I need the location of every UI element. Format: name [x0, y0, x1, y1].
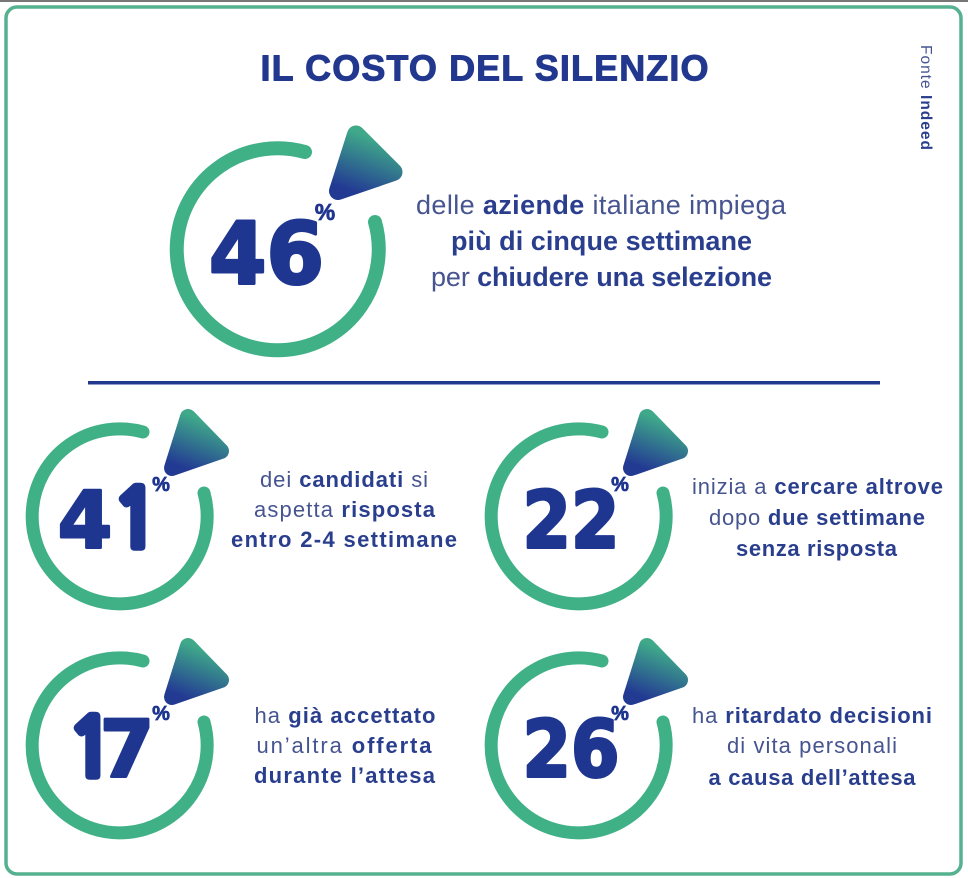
text: 17%: [254, 703, 436, 788]
ring: [32, 658, 207, 833]
divider: [88, 381, 880, 384]
source note: Fonte Indeed: [917, 45, 934, 150]
text: 22%: [692, 474, 943, 561]
icon: triangle pointer: [631, 646, 680, 697]
statistic: 22%: [491, 417, 680, 604]
text: 26%: di vita personali: [727, 733, 897, 758]
main statistic text: per chiudere una selezione: [431, 262, 772, 292]
text: 41%: entro 2-4 settimane: [231, 527, 457, 552]
text: 17%: un’altra offerta: [256, 733, 432, 758]
percent sign: %: [152, 703, 170, 725]
ring: [491, 429, 666, 604]
title: IL COSTO DEL SILENZIO: [260, 48, 708, 88]
main statistic: 46%: [177, 134, 394, 350]
number: 4: [58, 476, 112, 566]
number: 46: [209, 204, 324, 304]
main statistic text: delle aziende italiane impiega: [416, 190, 787, 220]
statistic: 26%: [491, 646, 680, 833]
text: 41%: [231, 467, 457, 552]
text: 17%: ha già accettato: [254, 703, 436, 728]
statistic: 41%: [32, 417, 221, 604]
number: 1: [66, 710, 116, 790]
text: 22%: inizia a cercare altrove: [692, 474, 943, 499]
ring: [491, 658, 666, 833]
text: 26%: [692, 703, 932, 790]
text: 26%: ha ritardato decisioni: [692, 703, 932, 728]
text: 22%: dopo due settimane: [709, 505, 925, 530]
ring: [177, 148, 379, 350]
text: 41%: aspetta risposta: [254, 497, 436, 522]
icon: triangle pointer: [172, 417, 221, 468]
text: 22%: senza risposta: [736, 536, 898, 561]
main statistic text: [416, 190, 787, 292]
text: 41%: dei candidati si: [260, 467, 428, 492]
percent sign: %: [611, 703, 629, 725]
number: 26: [522, 706, 620, 796]
statistic: 17%: [32, 646, 221, 833]
percent sign: %: [152, 474, 170, 496]
main statistic text: più di cinque settimane: [451, 226, 752, 256]
icon: triangle pointer: [172, 646, 221, 697]
ring: [32, 429, 207, 604]
text: 17%: durante l’attesa: [254, 763, 436, 788]
number: 1: [111, 480, 161, 560]
percent sign: %: [315, 199, 335, 225]
percent sign: %: [611, 474, 629, 496]
number: 22: [522, 476, 620, 566]
icon: triangle pointer: [631, 417, 680, 468]
icon: triangle pointer: [338, 134, 394, 191]
number: 7: [100, 706, 154, 796]
text: 26%: a causa dell’attesa: [708, 765, 916, 790]
